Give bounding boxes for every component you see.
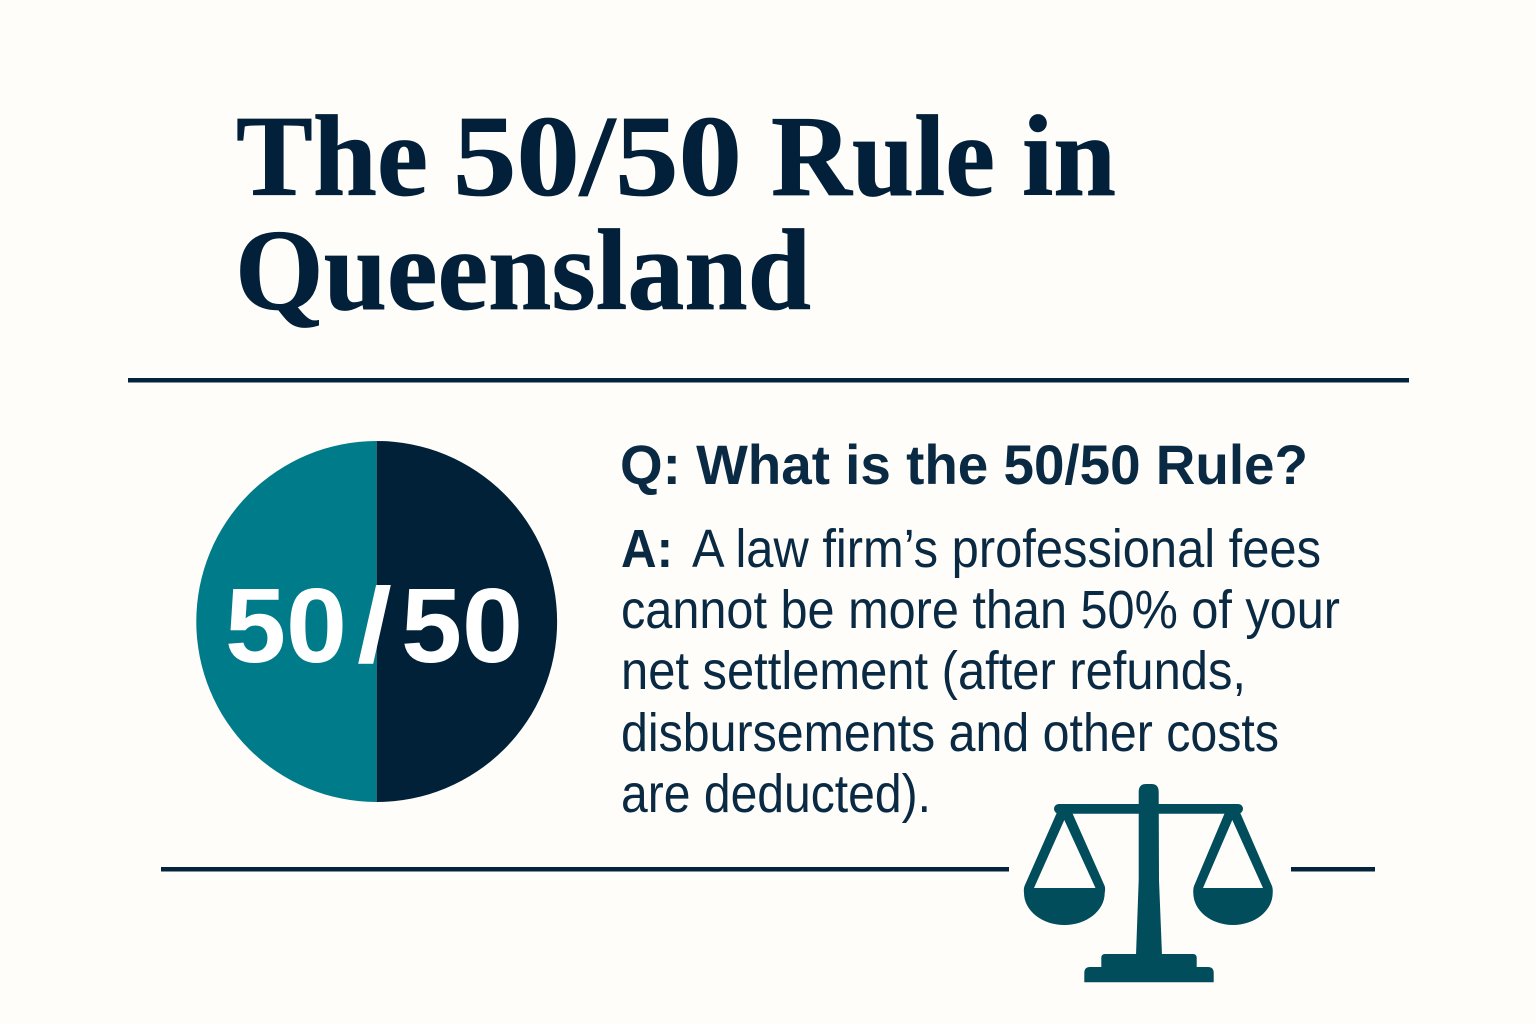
- answer text: [621, 519, 1340, 824]
- answer text: A law firm’s professional fees: [692, 519, 1321, 579]
- 50/50 pie chart: [196, 441, 557, 802]
- answer text: cannot be more than 50% of your: [621, 580, 1340, 640]
- left pan: [1024, 810, 1105, 925]
- beam: [1054, 804, 1243, 814]
- title: The: [236, 93, 428, 221]
- question heading: Q: What is the 50/50 Rule?: [620, 433, 1308, 496]
- answer text: are deducted).: [621, 764, 931, 824]
- pie label: /: [357, 567, 392, 685]
- title: Queensland: [235, 207, 811, 335]
- answer text: disbursements and other costs: [621, 703, 1279, 763]
- pie label: 50: [401, 567, 523, 685]
- answer text: A:: [621, 519, 673, 579]
- title: in: [1022, 93, 1116, 221]
- post: [1136, 784, 1162, 955]
- icon: scales of justice: [1024, 784, 1273, 982]
- right half: navy: [377, 441, 557, 802]
- left half: teal: [196, 441, 377, 802]
- pie label: 50: [225, 567, 347, 685]
- title: 50/50: [453, 93, 742, 221]
- pie label: [225, 567, 523, 685]
- title: Rule: [771, 93, 995, 221]
- base: [1084, 954, 1214, 982]
- right pan: [1193, 810, 1273, 925]
- answer text: net settlement (after refunds,: [621, 641, 1246, 701]
- title: [235, 93, 1116, 335]
